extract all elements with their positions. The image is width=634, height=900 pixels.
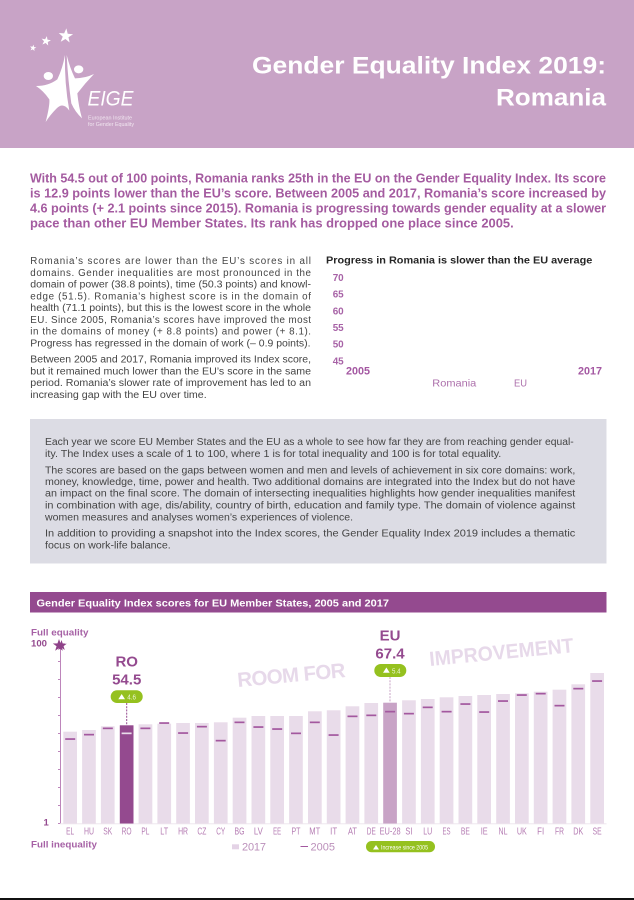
panel: about the index: money, knowledge, time, power and health. Two additional domains are integrated into the Index but do not have bbox=[45, 477, 576, 488]
y axis labels: 70 bbox=[333, 273, 344, 284]
body text column: Progress has regressed in the domain of work (– 0.9 points). bbox=[30, 338, 311, 349]
legend: Romania bbox=[432, 378, 476, 390]
country labels: IT bbox=[330, 826, 337, 837]
country labels: FR bbox=[555, 826, 564, 837]
country labels: RO bbox=[122, 826, 132, 837]
legend bbox=[432, 378, 527, 390]
country labels: EE bbox=[273, 826, 281, 837]
country labels: SI bbox=[405, 826, 412, 837]
watermark: room for improvement: IMPROVEMENT bbox=[428, 634, 575, 671]
panel: about the index: The scores are based on the gaps between women and men and levels of achievement in six core domains: work, bbox=[45, 465, 575, 476]
country labels: UK bbox=[517, 826, 527, 837]
y axis labels: 60 bbox=[333, 306, 344, 317]
country labels: PT bbox=[291, 826, 300, 837]
axis labels: 1 bbox=[44, 818, 50, 829]
body text column: edge (51.5). Romania’s highest score is in the domain of bbox=[30, 291, 311, 302]
bars 2017 bbox=[63, 673, 604, 824]
body text column: Romania’s scores are lower than the EU’s scores in all bbox=[30, 256, 311, 267]
axis labels: Full equality bbox=[31, 628, 89, 639]
body text column: domains. Gender inequalities are most pronounced in the bbox=[30, 268, 312, 279]
axis labels: Full inequality bbox=[31, 840, 98, 851]
body text column: in the domains of money (+ 8.8 points) and power (+ 8.1). bbox=[30, 327, 311, 338]
country labels: SK bbox=[103, 826, 113, 837]
callout: EU: EU bbox=[380, 628, 400, 645]
footer rule bbox=[0, 898, 634, 900]
body text column: period. Romania’s slower rate of improvement has led to an bbox=[30, 378, 311, 389]
panel: about the index: ity. The Index uses a scale of 1 to 100, where 1 is for total inequality and 100 is for total equality. bbox=[45, 449, 501, 460]
x axis labels: 2005 bbox=[346, 365, 370, 377]
panel: about the index: In addition to providing a snapshot into the Index scores, the Gender Equality Index 2019 includes a thematic bbox=[45, 529, 575, 540]
country labels: IE bbox=[481, 826, 488, 837]
bar chart heading bbox=[30, 592, 606, 612]
callout: EU: 5.4 bbox=[392, 668, 401, 675]
body text column: Between 2005 and 2017, Romania improved its Index score, bbox=[30, 355, 311, 366]
panel: about the index: Each year we score EU Member States and the EU as a whole to see how far they are from reaching gender equal- bbox=[45, 437, 574, 448]
legend bbox=[232, 841, 435, 854]
y axis labels: 45 bbox=[333, 357, 344, 368]
legend: 2005 bbox=[310, 842, 335, 854]
legend: EU bbox=[514, 378, 527, 390]
country labels: EU-28 bbox=[380, 826, 401, 837]
callout: EU: 67.4 bbox=[375, 645, 405, 662]
country labels: CY bbox=[216, 826, 225, 837]
chart title: Progress in Romania is slower than the EU average bbox=[326, 254, 592, 266]
y axis labels: 65 bbox=[333, 290, 344, 301]
callout: Romania: 54.5 bbox=[112, 672, 141, 689]
body text column: EU. Since 2005, Romania’s scores have improved the most bbox=[30, 315, 311, 326]
baseline bbox=[60, 823, 606, 824]
panel: about the index: in combination with age, dis/ability, country of birth, education and family type. The domain of violence against bbox=[45, 501, 576, 512]
country labels: FI bbox=[537, 826, 544, 837]
icon: full equality star bbox=[53, 639, 67, 651]
body text column: increasing gap with the EU over time. bbox=[30, 390, 207, 401]
watermark: room for improvement bbox=[236, 634, 575, 692]
country labels: MT bbox=[309, 826, 320, 837]
lead paragraph: pace than other EU Member States. Its rank has dropped one place since 2005. bbox=[30, 216, 514, 231]
country labels: LV bbox=[254, 826, 263, 837]
lead paragraph bbox=[30, 171, 607, 231]
legend: 2017 bbox=[242, 842, 266, 854]
country labels: BE bbox=[461, 826, 470, 837]
panel: about the index bbox=[30, 419, 606, 564]
y axis labels: 50 bbox=[333, 340, 344, 351]
lead paragraph: 4.6 points (+ 2.1 points since 2015). Romania is progressing towards gender equality at a slower bbox=[30, 201, 606, 216]
legend: Increase since 2005 bbox=[381, 844, 428, 851]
country labels: PL bbox=[141, 826, 150, 837]
body text column bbox=[30, 256, 312, 401]
callout: Romania: 4.6 bbox=[127, 695, 136, 702]
country labels: CZ bbox=[197, 826, 206, 837]
panel: about the index: women measures and analyses women’s experiences of violence. bbox=[44, 512, 353, 523]
title bbox=[252, 52, 607, 112]
logo: EIGE: European Institute bbox=[88, 115, 132, 121]
country labels: HU bbox=[84, 826, 94, 837]
country labels: NL bbox=[499, 826, 508, 837]
watermark: room for improvement: ROOM FOR bbox=[236, 659, 347, 692]
logo: EIGE bbox=[29, 28, 135, 128]
panel: about the index: focus on work-life balance. bbox=[45, 540, 171, 551]
country labels: SE bbox=[593, 826, 602, 837]
bar chart heading: Gender Equality Index scores for EU Member States, 2005 and 2017 bbox=[36, 598, 389, 610]
body text column: but it remained much lower than the EU’s score in the same bbox=[30, 366, 312, 377]
body text column: health (71.1 points), but this is the lowest score in the whole bbox=[30, 303, 312, 314]
title: Romania bbox=[496, 85, 607, 112]
body text column: domain of power (38.8 points), time (50.3 points) and knowl- bbox=[30, 280, 311, 291]
lead paragraph: is 12.9 points lower than the EU’s score. Between 2005 and 2017, Romania’s score increased by bbox=[30, 186, 607, 201]
2005 markers bbox=[65, 680, 602, 742]
line chart: progress in Romania bbox=[326, 254, 602, 390]
country labels: LU bbox=[423, 826, 432, 837]
country labels: ES bbox=[443, 826, 451, 837]
logo: EIGE: for Gender Equality bbox=[88, 122, 135, 128]
x axis labels bbox=[346, 365, 602, 377]
country labels: AT bbox=[348, 826, 357, 837]
logo: EIGE: EIGE bbox=[88, 88, 134, 110]
callout: EU bbox=[374, 628, 406, 702]
panel: about the index: an impact on the final score. The domain of intersecting inequalities highlights how gender inequalities manifest bbox=[45, 489, 576, 500]
y axis with ticks bbox=[58, 645, 61, 824]
country labels: HR bbox=[178, 826, 188, 837]
callout: Romania: RO bbox=[115, 654, 138, 671]
callout: Romania bbox=[111, 654, 143, 725]
y axis labels bbox=[333, 273, 344, 368]
country labels: EL bbox=[66, 826, 74, 837]
country labels: DE bbox=[367, 826, 376, 837]
header banner bbox=[0, 0, 634, 148]
lead paragraph: With 54.5 out of 100 points, Romania ranks 25th in the EU on the Gender Equality Index. Its score bbox=[30, 171, 606, 186]
x axis labels: 2017 bbox=[578, 365, 602, 377]
axis labels: 100 bbox=[31, 639, 47, 650]
axis labels bbox=[31, 628, 98, 851]
country labels bbox=[66, 826, 602, 837]
country labels: BG bbox=[235, 826, 245, 837]
y axis labels: 55 bbox=[333, 323, 344, 334]
bar chart: index scores bbox=[31, 628, 606, 854]
title: Gender Equality Index 2019: bbox=[252, 52, 606, 79]
country labels: DK bbox=[573, 826, 584, 837]
country labels: LT bbox=[160, 826, 168, 837]
